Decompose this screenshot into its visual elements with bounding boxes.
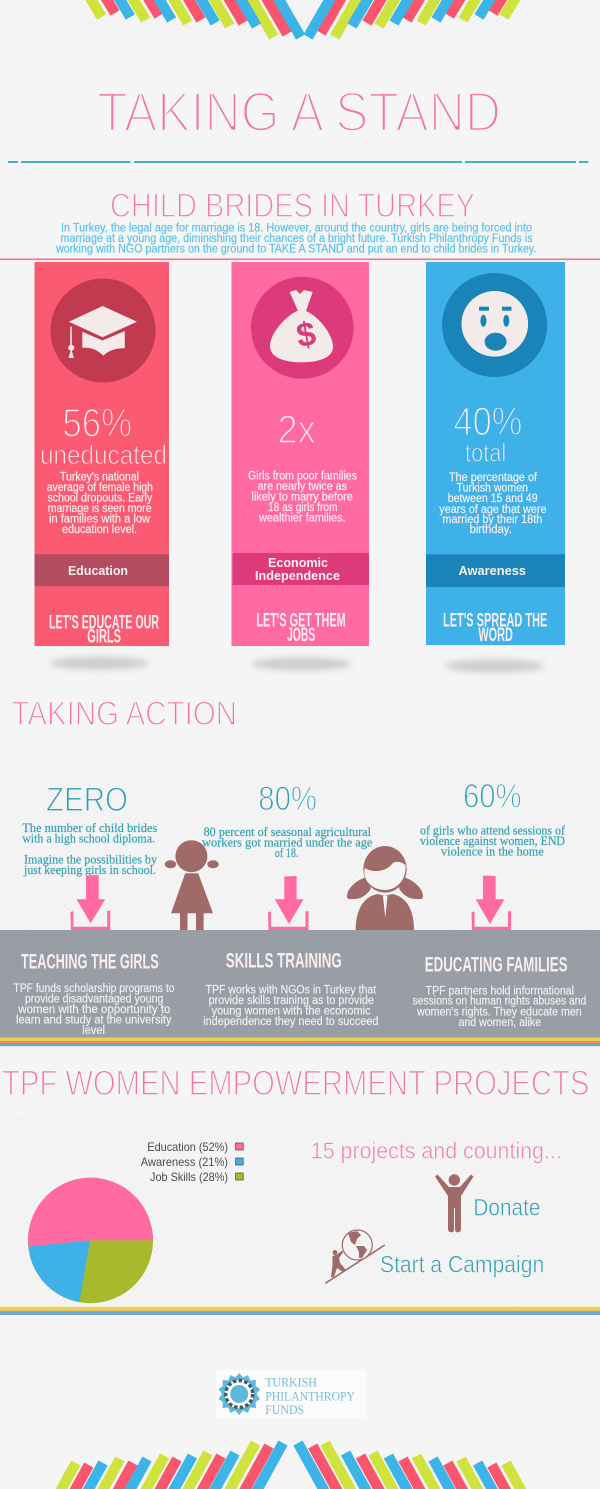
call to action: LET'S EDUCATE OUR xyxy=(49,612,159,634)
stat label: total: total xyxy=(465,438,506,468)
body text: are nearly twice as xyxy=(258,481,347,493)
body text: wealthier families. xyxy=(258,512,346,524)
stat label: uneducated: uneducated xyxy=(40,440,167,470)
program: skills training: young women with the economic xyxy=(212,1005,371,1017)
call to action: JOBS xyxy=(287,625,315,646)
text: 80%: workers got married under the age xyxy=(202,834,373,850)
legend: Awareness (21%) xyxy=(141,1155,228,1169)
program: teaching the girls: women with the opportunity to xyxy=(17,1004,170,1016)
panel: awareness xyxy=(426,262,565,646)
call to action xyxy=(443,611,547,646)
top stripes xyxy=(89,0,517,37)
logo wordmark: TURKISH xyxy=(265,1376,317,1390)
panel: programs xyxy=(0,930,600,1038)
text: zero xyxy=(22,820,157,877)
band: education xyxy=(34,554,169,586)
pie chart xyxy=(28,1178,153,1303)
band: economic independence xyxy=(233,553,369,585)
band: education: Education xyxy=(68,563,128,578)
logo wordmark: FUNDS xyxy=(265,1403,304,1417)
body text xyxy=(248,470,357,524)
stat: zero: ZERO xyxy=(46,781,128,819)
icon: woman with pigtails xyxy=(347,846,423,930)
label: donate: Donate xyxy=(473,1195,540,1222)
body text xyxy=(439,472,546,536)
body text: 18 as girls from xyxy=(268,502,338,514)
projects counter: 15 projects and counting... xyxy=(311,1137,562,1163)
label: start a campaign: Start a Campaign xyxy=(380,1251,544,1278)
program: skills training: TPF works with NGOs in Turkey that xyxy=(206,984,377,996)
legend: Education (52%) xyxy=(147,1140,228,1154)
body text: The percentage of xyxy=(449,472,538,484)
icon: graduation cap xyxy=(50,278,156,382)
intro paragraph: marriage at a young age, diminishing their chances of a bright future. Turkish Philanthropy Funds is xyxy=(60,233,533,245)
body text: Girls from poor families xyxy=(248,470,357,482)
logo wordmark: PHILANTHROPY xyxy=(265,1389,355,1403)
program: skills training: SKILLS TRAINING xyxy=(226,949,342,972)
action column: zero xyxy=(22,781,157,877)
text: 60% xyxy=(420,822,566,858)
stat: 40%: 40% xyxy=(454,400,522,444)
text: zero: The number of child brides xyxy=(22,820,157,835)
text: zero: just keeping girls in school. xyxy=(23,862,156,877)
text: 80%: of 18. xyxy=(275,845,298,860)
call to action: LET'S GET THEM xyxy=(256,611,346,632)
heading: child brides: CHILD BRIDES IN TURKEY xyxy=(110,187,475,225)
legend xyxy=(141,1140,243,1184)
program: skills training: provide skills training as to provide xyxy=(209,995,374,1007)
program: teaching the girls: level xyxy=(82,1025,105,1037)
logo wordmark xyxy=(265,1376,355,1417)
icon: young girl xyxy=(165,840,219,931)
action column: 80% xyxy=(202,780,373,860)
icon: money bag: $ xyxy=(294,315,319,355)
program: educating families xyxy=(412,954,586,1029)
text: zero: with a high school diploma. xyxy=(22,830,155,846)
panel: economic independence xyxy=(232,262,369,646)
icon: shocked face xyxy=(442,273,547,377)
body text: average of female high xyxy=(47,482,153,494)
stat: 2x: 2x xyxy=(278,408,316,452)
icon: money bag xyxy=(251,277,354,379)
call to action: WORD xyxy=(478,625,513,646)
program: teaching the girls: learn and study at the university xyxy=(16,1014,172,1026)
program: educating families: sessions on human rights abuses and xyxy=(412,996,586,1008)
body text: school dropouts. Early xyxy=(48,492,153,504)
logo: turkish philanthropy funds xyxy=(216,1370,366,1418)
call to action: GIRLS xyxy=(87,627,121,648)
bottom stripes xyxy=(58,1443,524,1489)
band: economic independence: Economic xyxy=(268,555,328,570)
band: awareness xyxy=(426,554,565,587)
text: 60%: violence against women, END xyxy=(420,833,565,848)
text: 80%: 80 percent of seasonal agricultural xyxy=(204,824,371,839)
program: teaching the girls: provide disadvantaged young xyxy=(25,994,163,1006)
program: teaching the girls xyxy=(13,950,175,1037)
stat: 60%: 60% xyxy=(463,777,522,815)
body text: years of age that were xyxy=(439,504,546,516)
text: 80% xyxy=(202,824,373,860)
body text: likely to marry before xyxy=(251,492,353,504)
body text: married by their 18th xyxy=(442,514,542,526)
program: teaching the girls: TEACHING THE GIRLS xyxy=(21,950,159,973)
arrow: to skills training xyxy=(268,876,308,931)
panel shadows xyxy=(50,657,545,672)
program: educating families: women's rights. They educate men xyxy=(416,1006,582,1018)
call to action xyxy=(49,612,159,648)
text: 60%: of girls who attend sessions of xyxy=(420,822,566,838)
band: awareness: Awareness xyxy=(458,563,526,578)
pink rule xyxy=(0,258,600,260)
program: educating families: and women, alike xyxy=(458,1017,541,1029)
stat: 56%: 56% xyxy=(62,402,132,446)
body text: between 15 and 49 xyxy=(448,493,538,505)
program: skills training xyxy=(203,949,378,1028)
intro paragraph: In Turkey, the legal age for marriage is 18. However, around the country, girls are being forced into xyxy=(61,222,532,234)
heading: taking action: TAKING ACTION xyxy=(12,695,237,733)
intro paragraph: working with NGO partners on the ground to TAKE A STAND and put an end to child brides in Turkey. xyxy=(55,244,536,256)
text: zero: Imagine the possibilities by xyxy=(24,852,157,866)
arrow: to teaching the girls xyxy=(70,875,110,931)
panel: education xyxy=(34,262,169,648)
arrow: to educating families xyxy=(472,876,511,931)
logo mark xyxy=(218,1373,260,1415)
body text: birthday. xyxy=(470,524,512,536)
legend: Job Skills (28%) xyxy=(150,1170,228,1184)
program: teaching the girls: TPF funds scholarship programs to xyxy=(13,983,175,995)
call to action xyxy=(256,611,346,646)
program: educating families: TPF partners hold informational xyxy=(426,985,574,997)
title: TAKING A STAND xyxy=(97,80,501,143)
body text: Turkey's national xyxy=(60,472,139,484)
divider xyxy=(8,161,588,163)
icon: figure pushing globe uphill xyxy=(325,1230,385,1283)
body text: Turkish women xyxy=(457,482,528,494)
body text: in families with a low xyxy=(49,514,151,526)
body text: education level. xyxy=(62,524,137,536)
body text: marriage is seen more xyxy=(48,503,151,515)
band: economic independence: Independence xyxy=(255,568,340,583)
intro paragraph xyxy=(55,222,536,256)
stat: 80%: 80% xyxy=(258,780,317,818)
icon: person arms raised xyxy=(435,1174,474,1232)
action column: 60% xyxy=(420,777,566,858)
text: 60%: violence in the home xyxy=(441,844,544,858)
program: skills training: independence they need to succeed xyxy=(203,1016,378,1028)
body text xyxy=(47,472,153,536)
